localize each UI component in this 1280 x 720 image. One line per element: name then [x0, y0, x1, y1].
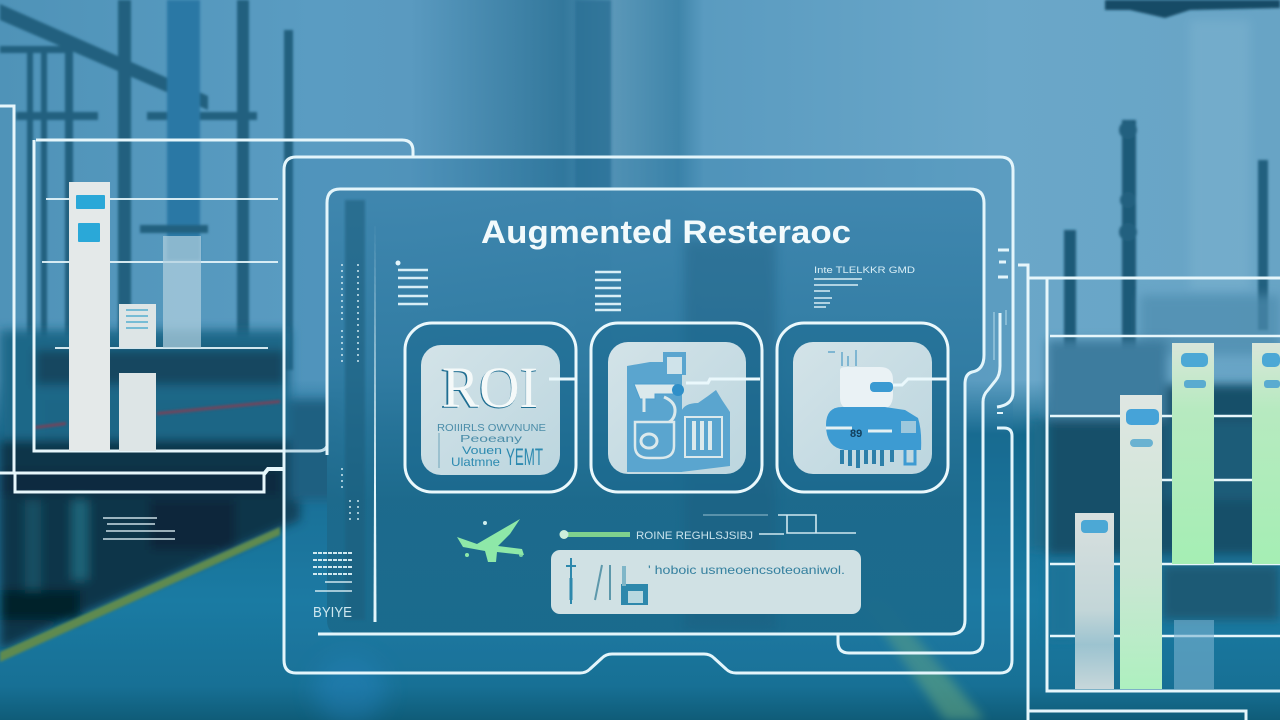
left chart panel [34, 140, 413, 451]
ROI small text: YEMT [506, 444, 543, 471]
right chart bar 2 [1120, 395, 1162, 689]
ROI small text: ROIIIRLS OWVNUNE [437, 423, 546, 434]
card: ROI [405, 323, 576, 492]
text lines: column three [814, 265, 916, 307]
right chart grid lines [1050, 336, 1280, 636]
progress row: ROINE REGHLSJSIBJ [636, 530, 753, 542]
right chart bar 3 [1172, 343, 1214, 689]
icon: robot: 89 [850, 428, 862, 440]
right chart panel [1018, 265, 1280, 720]
small text block: BYIYE [313, 604, 352, 621]
info box [551, 550, 861, 614]
card: machinery [591, 323, 762, 492]
text lines: column three: Inte TLELKKR GMD [814, 265, 916, 275]
small text block [313, 553, 352, 621]
ROI small text: Vouen [462, 445, 502, 457]
icon: green airplane [457, 519, 524, 562]
ticks beside main panel [342, 264, 358, 520]
ROI label: ROI [442, 355, 538, 420]
main inner panel [318, 189, 1009, 653]
ROI small text: Ulatmne [451, 455, 500, 469]
ROI label: ROI [440, 356, 538, 421]
left chart tall bar [69, 182, 110, 451]
right chart bar 4 [1252, 343, 1280, 564]
icon: equipment [627, 352, 730, 472]
left chart faded bar [163, 236, 201, 348]
far-left frame [0, 106, 284, 492]
text lines: column two [595, 272, 621, 310]
right chart bar 1 [1075, 513, 1114, 689]
icon: tools [566, 558, 648, 605]
main outer panel [284, 157, 1013, 673]
text lines: column one [396, 260, 428, 304]
progress row [560, 515, 856, 542]
ROI small text [437, 423, 546, 471]
small floating text lines [103, 518, 175, 539]
left chart grid lines [42, 199, 278, 348]
title: Augmented Resteraoc [481, 214, 851, 250]
ROI small text: Peoeany [460, 434, 522, 445]
left chart short bar [119, 304, 156, 451]
info text: ' hoboic usmeoencsoteoaniwol. [648, 563, 845, 577]
card: robot [777, 323, 948, 492]
icon: robot [826, 350, 921, 468]
